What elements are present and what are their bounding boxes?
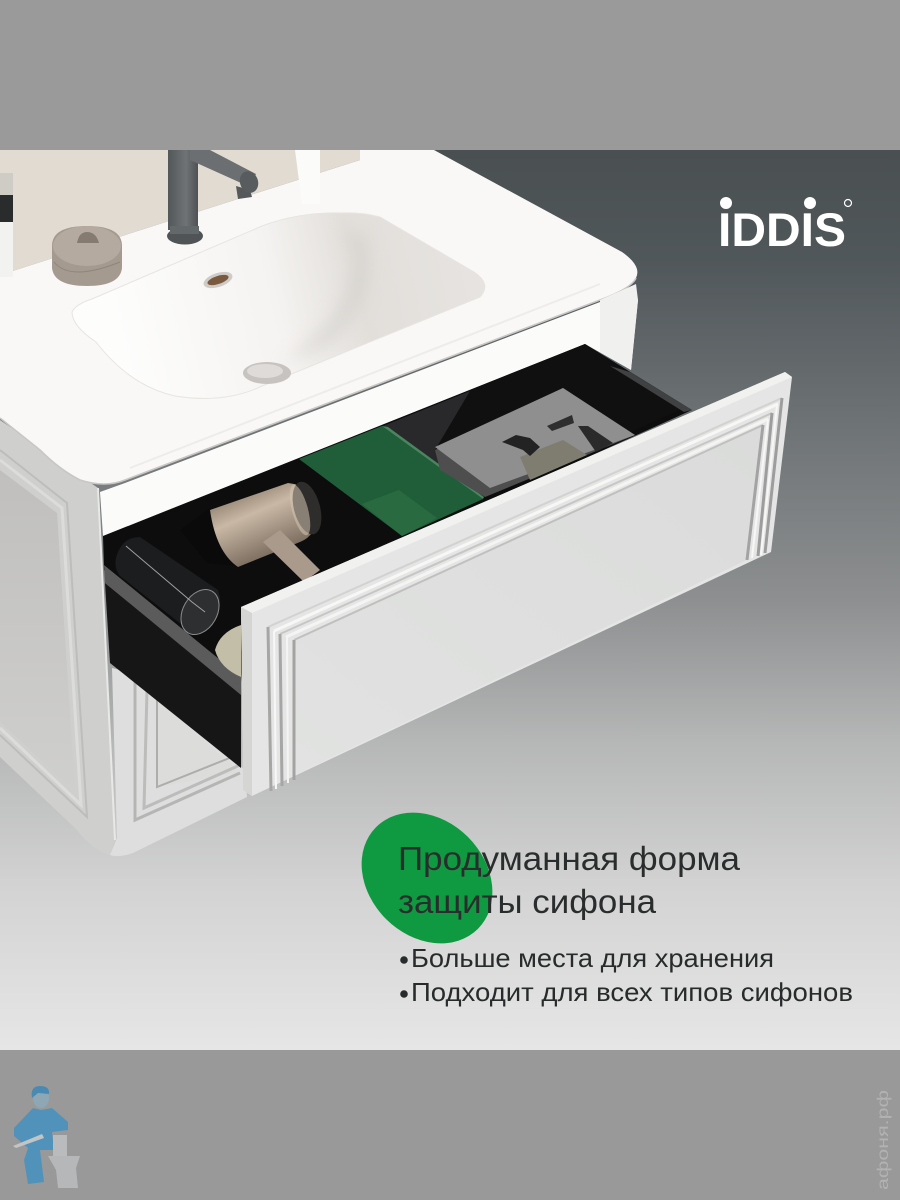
green blob	[335, 786, 519, 970]
heading	[398, 840, 741, 920]
sponge	[215, 625, 241, 677]
overflow hole	[202, 269, 234, 291]
towel with bottles	[435, 388, 635, 497]
icon: plumber with toilet	[13, 1086, 80, 1188]
heading: Продуманная форма	[398, 840, 741, 877]
recessed panel	[294, 425, 763, 775]
bullet list: Больше места для хранения	[411, 943, 774, 973]
glass at left	[0, 173, 13, 277]
hair dryer	[180, 479, 327, 582]
left moulding bands	[268, 627, 271, 791]
logo: IDDIS	[718, 203, 846, 256]
faucet	[167, 150, 261, 244]
bullet list	[400, 943, 853, 1007]
bullet list: Подходит для всех типов сифонов	[411, 977, 853, 1007]
watermark: афоня.рф	[875, 1090, 892, 1190]
top grey band	[0, 0, 900, 150]
bottom grey band	[0, 1050, 900, 1200]
drain	[243, 362, 291, 384]
background panel	[0, 150, 900, 1050]
heading: защиты сифона	[398, 883, 657, 920]
lower cabinet front	[110, 668, 247, 856]
countertop with sink	[0, 150, 637, 484]
top moulding lines	[268, 398, 782, 627]
green organizer	[299, 426, 484, 536]
vanity cabinet side	[0, 420, 115, 855]
black cylinder	[115, 537, 227, 641]
vanity apron under countertop	[100, 286, 638, 536]
sink basin	[72, 213, 485, 398]
right moulding bands	[765, 398, 782, 553]
round box	[52, 226, 122, 286]
open drawer interior	[103, 344, 692, 768]
white bottle	[295, 150, 320, 204]
wall behind vanity	[0, 150, 360, 275]
drawer front panel	[241, 372, 792, 796]
